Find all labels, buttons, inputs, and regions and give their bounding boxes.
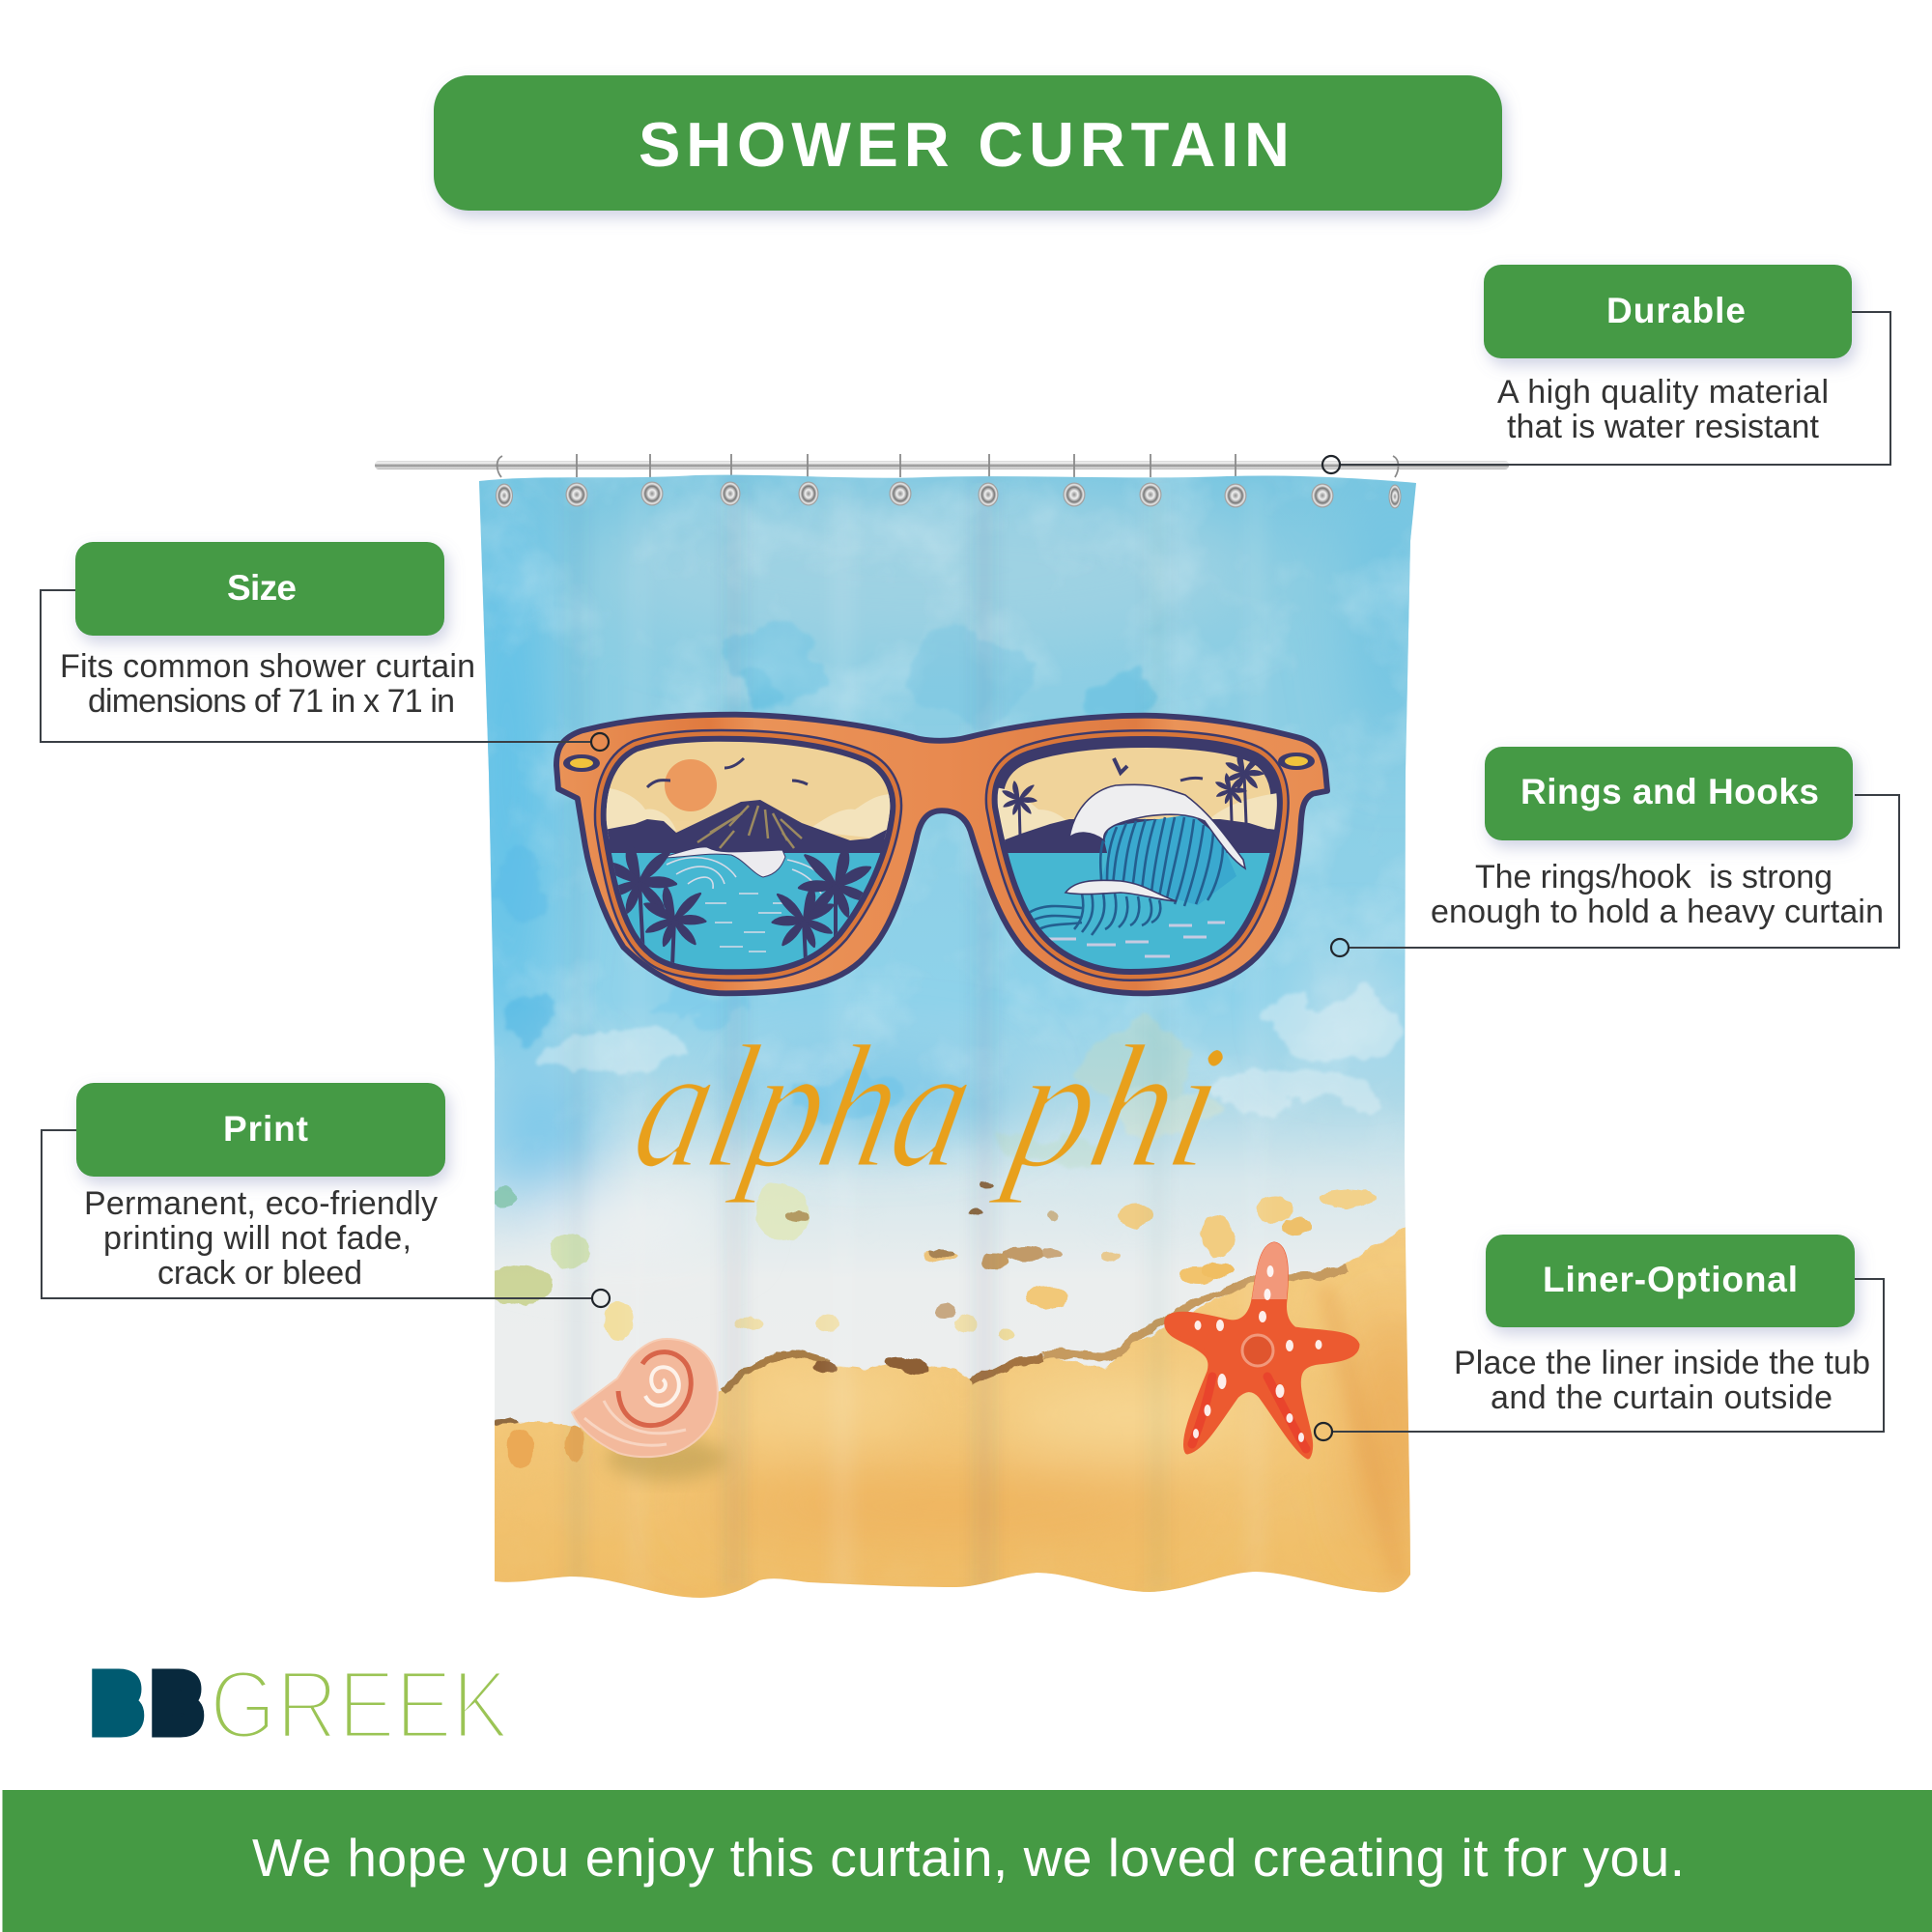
callout: print <box>42 1083 610 1307</box>
callout: size: Size <box>227 568 297 608</box>
title banner <box>434 75 1502 211</box>
right lens scene <box>990 742 1285 974</box>
grommets <box>497 482 1401 508</box>
sand <box>483 1217 1430 1613</box>
title banner: SHOWER CURTAIN <box>639 109 1290 180</box>
callout: rings and hooks: enough to hold a heavy curtain <box>1431 894 1884 930</box>
logo: BB Greek: B <box>153 1658 202 1748</box>
callout: liner optional <box>1315 1235 1884 1440</box>
callout: size: Fits common shower curtain <box>60 648 475 685</box>
seashell <box>572 1339 726 1480</box>
callout: size: dimensions of 71 in x 71 in <box>88 683 455 720</box>
callout: rings and hooks <box>1331 747 1899 956</box>
callout: durable <box>1322 265 1890 473</box>
shower curtain product <box>375 454 1509 1613</box>
callout: rings and hooks: The rings/hook is strong <box>1475 859 1833 895</box>
watercolour sky washes <box>469 473 1425 1294</box>
callout: liner optional: and the curtain outside <box>1491 1379 1833 1416</box>
curtain script lettering: phi <box>986 1008 1239 1205</box>
curtain rod with hooks <box>375 454 1509 477</box>
callout: durable: that is water resistant <box>1507 409 1820 445</box>
curtain script lettering: alpha <box>620 1008 990 1205</box>
callout: durable: Durable <box>1606 291 1746 330</box>
callout: print: printing will not fade, <box>103 1220 412 1257</box>
callout: liner optional: Place the liner inside the tub <box>1454 1345 1870 1381</box>
logo: BB Greek: B <box>93 1658 142 1748</box>
left lens scene <box>599 734 898 974</box>
curtain fabric <box>464 464 1430 1613</box>
callout: rings and hooks: Rings and Hooks <box>1520 772 1819 811</box>
callout: print: crack or bleed <box>157 1255 362 1292</box>
callout: print: Permanent, eco-friendly <box>84 1185 438 1222</box>
frame <box>556 715 1327 993</box>
curtain script lettering <box>620 1008 1239 1205</box>
sunglasses <box>556 715 1327 993</box>
callout: print: Print <box>223 1109 308 1149</box>
wet sand shore stains <box>489 1182 1375 1342</box>
footer banner: We hope you enjoy this curtain, we loved creating it for you. <box>252 1828 1685 1888</box>
frame rivets <box>563 753 1315 772</box>
logo: BB Greek <box>93 1651 509 1759</box>
callout: liner optional: Liner-Optional <box>1543 1260 1798 1299</box>
fabric fold shading <box>570 483 1265 1594</box>
footer banner <box>2 1790 1932 1932</box>
callout: size <box>41 542 609 751</box>
callout: durable: A high quality material <box>1497 374 1829 411</box>
starfish <box>1167 1242 1357 1457</box>
logo: BB Greek: GREEK <box>210 1651 509 1759</box>
